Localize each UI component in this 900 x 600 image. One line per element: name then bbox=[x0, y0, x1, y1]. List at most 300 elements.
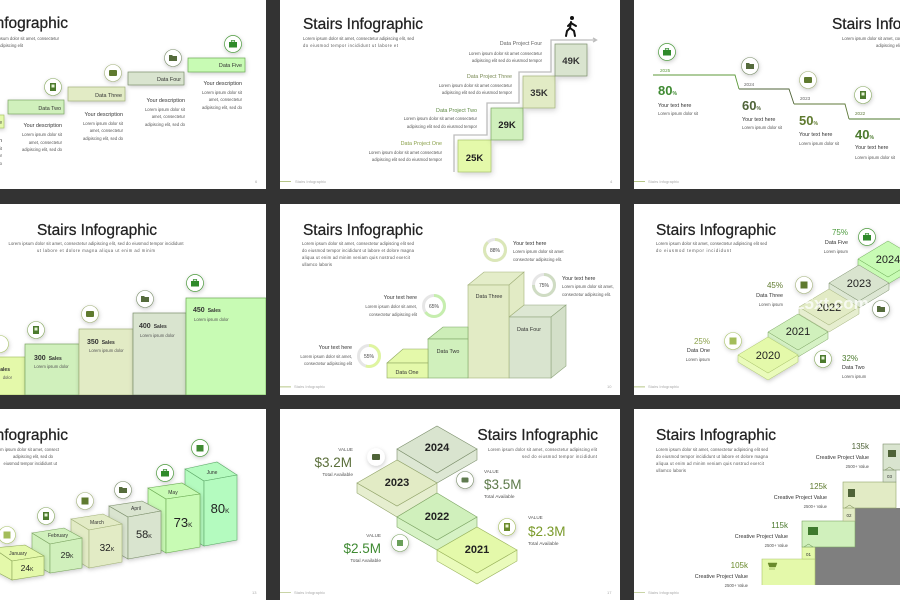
gray stair base bbox=[815, 508, 900, 585]
description: Data Two: amet, consectetur bbox=[29, 140, 63, 145]
label: Data Project Three: Lorem ipsum dolor sit amet consectetur bbox=[439, 83, 513, 88]
step: 125k bbox=[843, 482, 896, 508]
watermark: www.25xt.com bbox=[750, 294, 869, 313]
description: Data Three: adipiscing elit, sed do bbox=[83, 136, 124, 141]
step: 2021 bbox=[768, 314, 828, 357]
title: Stairs Infographic bbox=[656, 222, 776, 239]
footer: 10 bbox=[607, 384, 612, 389]
step: 2022 bbox=[799, 289, 859, 332]
step: Data Two: Data Two bbox=[38, 106, 61, 112]
value: $3.2M: VALUE bbox=[338, 447, 353, 452]
description: Data Three: Lorem ipsum dolor sit bbox=[83, 121, 124, 126]
panel: stairs with walking figure bbox=[280, 0, 620, 189]
step tab: 02: 02 bbox=[846, 513, 852, 518]
bar: 350 sales: 350 Sales bbox=[87, 339, 115, 346]
panel: sales bars bbox=[0, 204, 266, 395]
text: 55% block: Your text here bbox=[319, 345, 352, 351]
title: Stairs Infographic bbox=[303, 222, 423, 239]
page number: 6 bbox=[255, 179, 258, 184]
footer bbox=[634, 179, 679, 184]
box: February: 29K bbox=[61, 550, 74, 560]
footer bbox=[634, 590, 679, 595]
footer bbox=[280, 180, 612, 184]
icon: wallet bbox=[368, 448, 384, 466]
label: 135k: Creative Project Value bbox=[816, 455, 869, 461]
box: January: 24K bbox=[21, 563, 34, 573]
title: Stairs Infographic bbox=[303, 16, 423, 33]
3D bar: Data Four bbox=[509, 305, 566, 378]
subtitle text: adipiscing elit, sed do bbox=[13, 454, 54, 459]
step: 25K: 25K bbox=[466, 153, 483, 164]
panel: ascending data steps bbox=[0, 0, 266, 189]
3D bar: Data Three bbox=[468, 272, 524, 378]
description: Data Three bbox=[83, 112, 124, 141]
bar: 300 sales: 300 Sales bbox=[34, 355, 62, 362]
label: 105k: 2500+ Value bbox=[725, 583, 749, 588]
3D bar: Data One: Data One bbox=[395, 370, 419, 376]
box: April bbox=[109, 501, 161, 559]
item: 2023: Lorem ipsum dolor sit bbox=[799, 141, 840, 146]
3D bar: Data Two bbox=[428, 327, 468, 378]
item: 2025: Lorem ipsum dolor sit bbox=[658, 111, 699, 116]
title: Stairs Infographic bbox=[477, 427, 598, 444]
value: $2.3M: VALUE bbox=[528, 515, 543, 520]
box: March bbox=[71, 514, 122, 568]
icon: calendar bbox=[392, 534, 408, 552]
step: 135k bbox=[883, 444, 900, 470]
subtitle text bbox=[842, 36, 900, 48]
text: 65% block: consectetur adipiscing elit bbox=[369, 312, 418, 317]
label: 75% Data Five: Data Five bbox=[825, 240, 848, 246]
item: 2022: 40% bbox=[855, 127, 874, 142]
paragraph: Lorem ipsum dolor sit amet, consectetur adipiscing elit sed bbox=[656, 447, 769, 452]
step: Data Five bbox=[188, 58, 245, 72]
item: 2022: Lorem ipsum dolor sit bbox=[855, 155, 896, 160]
value: $2.3M: Total Available bbox=[528, 541, 559, 547]
bar: 300 sales: Lorem ipsum dolor bbox=[34, 364, 69, 369]
step: 2021: 2021 bbox=[465, 544, 489, 556]
box: February: February bbox=[48, 533, 68, 539]
icon: folder bbox=[456, 472, 474, 488]
description: Data Two: Your description bbox=[24, 123, 62, 129]
item: 2023: 2023 bbox=[800, 96, 811, 101]
icon: briefcase bbox=[858, 228, 876, 246]
value: $2.3M bbox=[528, 515, 566, 547]
icon: folder bbox=[872, 300, 890, 318]
step: 35K bbox=[523, 76, 555, 108]
panel: monthly 3D boxes bbox=[0, 409, 266, 600]
icon: book bbox=[44, 78, 62, 96]
footer bbox=[280, 384, 612, 389]
icon: calendar light bbox=[724, 332, 742, 350]
label: 135k bbox=[816, 442, 870, 469]
step: 2020 bbox=[738, 337, 798, 380]
step tab: 03 bbox=[883, 470, 896, 482]
bar: 250 sales: dolor bbox=[3, 375, 13, 380]
icon: briefcase bbox=[224, 36, 242, 52]
description: Data Five: amet, consectetur bbox=[209, 97, 243, 102]
subtitle text: sed do eiusmod tempor incididunt bbox=[522, 454, 598, 459]
box: April: April bbox=[131, 506, 141, 512]
icon: folder bbox=[136, 290, 154, 308]
step: 29K: 29K bbox=[498, 120, 516, 131]
paragraph: ullamco laboris bbox=[302, 262, 332, 267]
label: Data Project Two bbox=[404, 108, 478, 129]
label: 45% Data Three: Data Three bbox=[756, 293, 783, 299]
panel: isometric year steps bbox=[634, 204, 900, 395]
label: 115k bbox=[735, 521, 789, 548]
label: Data Project One: Data Project One bbox=[401, 141, 442, 147]
value: $3.2M bbox=[314, 447, 353, 478]
footer: Stairs Infographic bbox=[294, 590, 325, 595]
footer: Stairs Infographic bbox=[295, 179, 326, 184]
3D bar: Data One bbox=[387, 349, 428, 378]
donut: 65% bbox=[424, 296, 444, 316]
box: January bbox=[0, 545, 44, 580]
subtitle text: do eiusmod tempor incididunt ut labore et bbox=[303, 43, 399, 48]
panel: creative project value stairs bbox=[634, 409, 900, 600]
icon: wallet bbox=[76, 492, 94, 510]
gray stair line with arrow bbox=[454, 38, 596, 172]
label: Data Project Two: Lorem ipsum dolor sit amet consectetur bbox=[404, 116, 478, 121]
box: February bbox=[32, 528, 82, 573]
step: 2023: 2023 bbox=[847, 278, 871, 290]
label: 125k bbox=[774, 482, 828, 509]
bar: 400 sales: 400 Sales bbox=[139, 323, 167, 330]
step: Data Three bbox=[68, 87, 125, 101]
bar: 450 sales: Lorem ipsum dolor bbox=[194, 317, 229, 322]
item: 2024: 2024 bbox=[744, 82, 755, 87]
step: 2021: 2021 bbox=[786, 326, 810, 338]
paragraph: aliqua ut enim ad minim veniam quis nostrud exercit bbox=[302, 255, 411, 260]
icon: book bbox=[28, 322, 44, 338]
box: June bbox=[185, 462, 237, 546]
footer bbox=[280, 590, 612, 595]
bar: 450 sales bbox=[186, 298, 266, 395]
box: April: 58K bbox=[136, 529, 152, 541]
box: March: 32K bbox=[100, 543, 115, 554]
icon: folder bbox=[164, 50, 182, 66]
label: 25% Data One: 25% bbox=[694, 337, 710, 346]
donut: 55% bbox=[358, 346, 380, 366]
label: 115k: 115k bbox=[771, 521, 789, 530]
footer: 4 bbox=[610, 179, 613, 184]
step: 2024: 2024 bbox=[876, 254, 900, 266]
bar: 250 sales: ales bbox=[0, 367, 10, 373]
text: 75% block: Lorem ipsum dolor sit amet, bbox=[562, 284, 614, 289]
description: Data Three: amet, consectetur bbox=[90, 128, 124, 133]
description: Data Two bbox=[22, 123, 63, 152]
step tab: 03: 03 bbox=[887, 474, 892, 479]
panel: 3D bars with donuts bbox=[280, 204, 620, 395]
text: 75% block bbox=[562, 276, 614, 297]
item: 2023: 50% bbox=[799, 113, 818, 128]
label: Data Project Three: Data Project Three bbox=[467, 74, 512, 80]
step: Data Three: Data Three bbox=[95, 93, 122, 99]
label: 32% Data Two: Lorem ipsum bbox=[842, 374, 867, 379]
title: Stairs Infographic bbox=[656, 427, 776, 444]
text: 88% block: Your text here bbox=[513, 241, 546, 247]
step tab: 01 bbox=[802, 547, 815, 559]
step: Data One bbox=[0, 115, 4, 128]
paragraph: ullamco laboris bbox=[656, 468, 686, 473]
value: $3.5M: Total Available bbox=[484, 494, 515, 500]
icon: box bbox=[192, 440, 208, 456]
description: Data Four: amet, consectetur bbox=[152, 114, 186, 119]
step: 2023 bbox=[829, 265, 889, 308]
item: 2025: 2025 bbox=[660, 68, 671, 73]
step: 2020: 2020 bbox=[756, 350, 780, 362]
subtitle text bbox=[8, 241, 184, 253]
text: 75% block: Your text here bbox=[562, 276, 595, 282]
step: 29K bbox=[491, 108, 523, 140]
step: 115k bbox=[802, 521, 855, 547]
step: Data Two bbox=[8, 100, 64, 114]
item: 2022 bbox=[855, 111, 896, 160]
paragraph bbox=[302, 241, 415, 267]
label: 115k: Creative Project Value bbox=[735, 534, 788, 540]
label: Data Project One: adipiscing elit sed do eiusmod tempor bbox=[372, 157, 443, 162]
subtitle text: Lorem ipsum dolor sit amet, consectetur adipiscing elit bbox=[488, 447, 598, 452]
box: March: March bbox=[90, 520, 104, 526]
description: Data Four: Your description bbox=[147, 98, 185, 104]
label: Data Project Two: Data Project Two bbox=[436, 108, 477, 114]
step tab: 02 bbox=[843, 508, 855, 521]
bar: 400 sales: Lorem ipsum dolor bbox=[140, 333, 175, 338]
description: Data Two: Lorem ipsum dolor sit bbox=[22, 132, 63, 137]
paragraph bbox=[656, 447, 769, 473]
donut: 65%: 65% bbox=[429, 304, 440, 310]
icon: walking person bbox=[566, 16, 576, 36]
text: 55% block bbox=[300, 345, 353, 366]
icon: briefcase bbox=[156, 464, 174, 482]
value: $3.5M: VALUE bbox=[484, 469, 499, 474]
value: $3.5M bbox=[484, 469, 522, 500]
description: Data Four bbox=[145, 98, 186, 127]
panel: value isometric steps bbox=[280, 409, 620, 600]
bar: 350 sales bbox=[79, 329, 133, 395]
paragraph: aliqua ut enim ad minim veniam quis nostrud exercit bbox=[656, 461, 765, 466]
box: May: May bbox=[168, 490, 178, 496]
footer: 17 bbox=[607, 590, 612, 595]
icon: folder bbox=[742, 58, 758, 74]
icon: folder bbox=[114, 482, 132, 498]
paragraph: do eiusmod tempor incididunt ut labore et dolore magna bbox=[302, 248, 415, 253]
step: 49K bbox=[555, 44, 587, 76]
box: June: 80K bbox=[211, 501, 230, 516]
item: 2022: 2022 bbox=[855, 111, 866, 116]
item: 2025: 80% bbox=[658, 83, 677, 98]
label: 125k: Creative Project Value bbox=[774, 495, 827, 501]
subtitle text bbox=[0, 36, 60, 48]
label: 75% Data Five: 75% bbox=[832, 228, 848, 237]
bar: 400 sales bbox=[133, 313, 186, 395]
label: 135k: 2500+ Value bbox=[846, 464, 870, 469]
label: Data Project Four: adipiscing elit sed do eiusmod tempor bbox=[472, 58, 543, 63]
step: 2023: 2023 bbox=[385, 477, 409, 489]
step: Data Four bbox=[128, 72, 184, 85]
subtitle text: Lorem ipsum dolor sit amet, consectetur adipiscing elit sed bbox=[656, 241, 768, 246]
value: $2.5M: VALUE bbox=[366, 533, 381, 538]
item: 2024 bbox=[742, 82, 783, 130]
item: 2024: 60% bbox=[742, 98, 761, 113]
label: 45% Data Three: 45% bbox=[767, 281, 783, 290]
step: 2024 bbox=[858, 241, 900, 284]
label: 135k: 135k bbox=[852, 442, 870, 451]
label: 75% Data Five bbox=[824, 228, 849, 254]
title: Stairs Infographic bbox=[37, 222, 157, 239]
box: May bbox=[148, 483, 200, 553]
icon: book bbox=[854, 86, 872, 104]
description: Data Two: adipiscing elit, sed do bbox=[22, 147, 63, 152]
description: Data Five: adipiscing elit, sed do bbox=[202, 105, 243, 110]
step: 2024 bbox=[397, 426, 477, 483]
box: June: June bbox=[207, 470, 218, 476]
step: 49K: 49K bbox=[562, 56, 580, 67]
text: 65% block: Lorem ipsum dolor sit amet, bbox=[365, 304, 417, 309]
text: 88% block bbox=[513, 241, 564, 262]
label: Data Project Two: adipiscing elit sed do eiusmod tempor bbox=[407, 124, 478, 129]
text: 65% block: Your text here bbox=[384, 295, 417, 301]
description: Data One bbox=[0, 139, 2, 165]
step: Data Four: Data Four bbox=[157, 77, 181, 83]
icon: wallet bbox=[104, 64, 122, 82]
value: $2.3M: $2.3M bbox=[528, 524, 566, 539]
icon: wallet bbox=[82, 306, 98, 322]
label: Data Project Four: Data Project Four bbox=[500, 41, 542, 47]
donut: 55%: 55% bbox=[364, 354, 375, 360]
bar: 450 sales: 450 Sales bbox=[193, 307, 221, 314]
subtitle text: Lorem ipsum dolor sit amet, consectetur adipiscing elit, sed bbox=[303, 36, 415, 41]
subtitle text: Lorem ipsum dolor sit amet, consectetur adipiscing elit, sed do eiusmod tempor incididunt bbox=[8, 241, 184, 246]
item: 2023 bbox=[799, 96, 840, 146]
label: 32% Data Two: Data Two bbox=[842, 365, 865, 371]
icon: calendar bbox=[0, 336, 8, 352]
description: Data Three: Your description bbox=[85, 112, 123, 118]
label: 105k: Creative Project Value bbox=[695, 574, 748, 580]
donut: 88% bbox=[484, 240, 506, 260]
label: 45% Data Three bbox=[756, 281, 784, 307]
step: 2024: 2024 bbox=[425, 442, 450, 454]
step: 35K: 35K bbox=[530, 88, 548, 99]
footer: Stairs Infographic bbox=[648, 179, 679, 184]
step: 2022 bbox=[397, 493, 477, 550]
subtitle text bbox=[0, 447, 60, 466]
text: 88% block: consectetur adipiscing elit. bbox=[513, 257, 562, 262]
panel: percentage timeline bbox=[634, 0, 900, 189]
footer: Stairs Infographic bbox=[648, 384, 679, 389]
label: 125k: 2500+ Value bbox=[804, 504, 828, 509]
label: Data Project Three: adipiscing elit sed do eiusmod tempor bbox=[442, 90, 513, 95]
footer: Stairs Infographic bbox=[294, 384, 325, 389]
step: Data Five: Data Five bbox=[219, 63, 242, 69]
item: 2024: Your text here bbox=[742, 117, 775, 123]
paragraph: do eiusmod tempor incididunt ut labore et dolore magna bbox=[656, 454, 769, 459]
donut: 88%: 88% bbox=[490, 248, 501, 254]
bar: 350 sales: Lorem ipsum dolor bbox=[89, 348, 124, 353]
paragraph: Lorem ipsum dolor sit amet, consectetur adipiscing elit sed bbox=[302, 241, 415, 246]
donut: 75% bbox=[534, 274, 554, 296]
box: January: January bbox=[9, 551, 27, 557]
subtitle text bbox=[303, 36, 415, 48]
label: 115k: 2500+ Value bbox=[765, 543, 789, 548]
description: Data Four: adipiscing elit, sed do bbox=[145, 122, 186, 127]
label: 32% Data Two bbox=[842, 354, 867, 379]
label: Data Project Four bbox=[469, 41, 543, 63]
text: 75% block: consectetur adipiscing elit. bbox=[562, 292, 611, 297]
label: 105k bbox=[695, 561, 749, 588]
value: $2.5M: Total Available bbox=[350, 558, 381, 564]
step: 2022: 2022 bbox=[817, 302, 841, 314]
icon: briefcase bbox=[658, 44, 676, 60]
text: 65% block bbox=[365, 295, 418, 317]
label: Data Project Three bbox=[439, 74, 513, 95]
timeline stair line bbox=[653, 75, 900, 119]
donut: 75%: 75% bbox=[539, 283, 550, 289]
label: Data Project One bbox=[369, 141, 443, 162]
bar: 300 sales bbox=[25, 344, 79, 395]
label: 75% Data Five: Lorem ipsum bbox=[824, 249, 849, 254]
icon: calendar bbox=[0, 526, 16, 544]
footer: Stairs Infographic bbox=[648, 590, 679, 595]
subtitle text: ut labore et dolore magna aliqua ut enim ad minim bbox=[37, 248, 156, 253]
label: 125k: 125k bbox=[810, 482, 828, 491]
label: Data Project One: Lorem ipsum dolor sit amet consectetur bbox=[369, 150, 443, 155]
item: 2023: Your text here bbox=[799, 132, 832, 138]
3D bar: Data Four: Data Four bbox=[517, 327, 541, 333]
subtitle text: do eiusmod tempor incididunt bbox=[656, 248, 732, 253]
value: $3.2M: Total Available bbox=[322, 472, 353, 478]
label: 25% Data One: Data One bbox=[687, 348, 710, 354]
text: 55% block: consectetur adipiscing elit bbox=[304, 361, 353, 366]
description: Data Four: Lorem ipsum dolor sit bbox=[145, 107, 186, 112]
icon: book bbox=[498, 518, 516, 536]
label: 32% Data Two: 32% bbox=[842, 354, 858, 363]
item: 2025 bbox=[658, 68, 699, 116]
bar: 250 sales bbox=[0, 357, 25, 395]
item: 2024: Lorem ipsum dolor sit bbox=[742, 125, 783, 130]
description: Data Five: Lorem ipsum dolor sit bbox=[202, 90, 243, 95]
step: 2023 bbox=[357, 460, 437, 517]
label: 25% Data One: Lorem ipsum bbox=[686, 357, 711, 362]
step: 2021 bbox=[437, 527, 517, 584]
text: 88% block: Lorem ipsum dolor sit amet bbox=[513, 249, 564, 254]
value: $2.5M: $2.5M bbox=[343, 541, 381, 556]
page number: 13 bbox=[252, 590, 257, 595]
icon: wallet bbox=[800, 72, 816, 88]
footer bbox=[634, 384, 679, 389]
label: 45% Data Three: Lorem ipsum bbox=[759, 302, 784, 307]
icon: book bbox=[814, 350, 832, 368]
icon: book bbox=[38, 508, 54, 524]
item: 2022: Your text here bbox=[855, 145, 888, 151]
3D bar: Data Two: Data Two bbox=[437, 349, 459, 355]
step tab: 01: 01 bbox=[806, 552, 811, 557]
value: $3.5M: $3.5M bbox=[484, 477, 522, 492]
3D bar: Data Three: Data Three bbox=[476, 294, 502, 300]
icon: briefcase bbox=[186, 274, 204, 292]
value: $2.5M bbox=[343, 533, 381, 564]
step: 25K bbox=[458, 140, 491, 172]
description: Data Five: Your description bbox=[204, 81, 242, 87]
subtitle text bbox=[488, 447, 598, 459]
item: 2025: Your text here bbox=[658, 103, 691, 109]
label: Data Project Four: Lorem ipsum dolor sit amet consectetur bbox=[469, 51, 543, 56]
label: 25% Data One bbox=[686, 337, 711, 362]
value: $3.2M: $3.2M bbox=[314, 455, 352, 470]
step: 2022: 2022 bbox=[425, 511, 449, 523]
subtitle text: eiusmod tempor incididunt ut bbox=[3, 461, 58, 466]
